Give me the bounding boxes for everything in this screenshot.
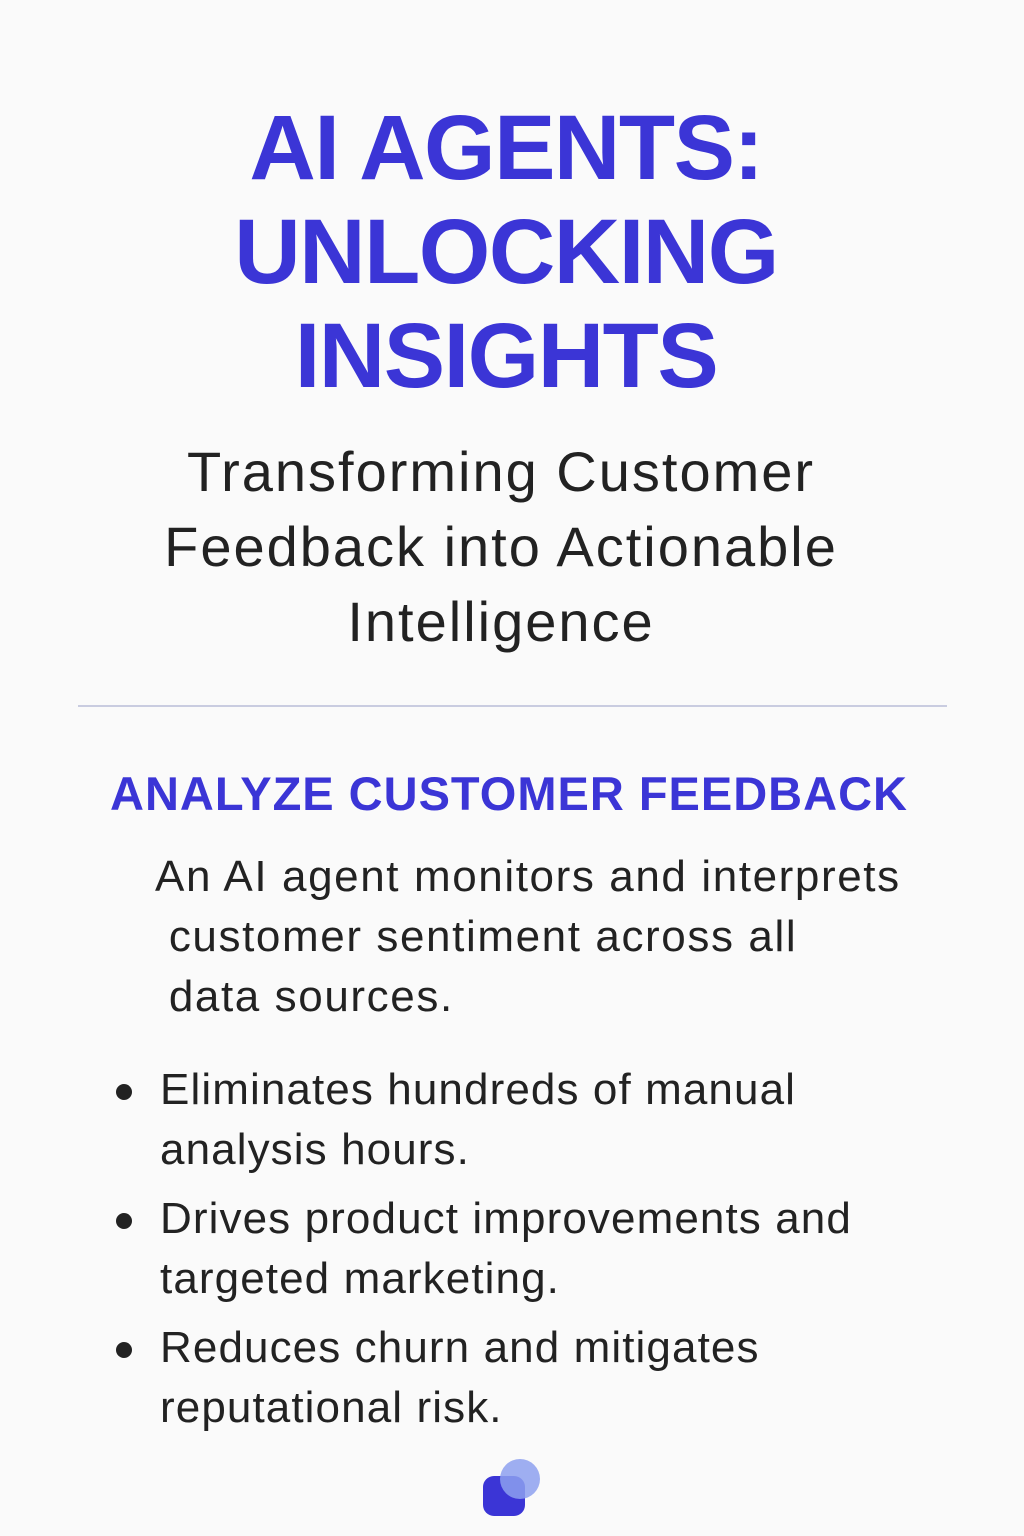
description paragraph <box>155 852 901 1021</box>
icon: overlapping shapes logo <box>483 1459 540 1516</box>
title <box>234 97 778 407</box>
description paragraph: data sources. <box>169 972 454 1021</box>
subtitle: Feedback into Actionable <box>164 515 838 578</box>
description paragraph: An AI agent monitors and interprets <box>155 852 901 901</box>
title: AI AGENTS: <box>249 97 763 199</box>
subtitle: Intelligence <box>347 590 655 653</box>
bullet 1 <box>116 1065 796 1174</box>
subtitle: Transforming Customer <box>187 440 815 503</box>
bullet 1: Eliminates hundreds of manual <box>160 1065 796 1114</box>
bullet 3 <box>116 1323 760 1432</box>
bullet 3: Reduces churn and mitigates <box>160 1323 760 1372</box>
bullet 2: Drives product improvements and <box>160 1194 852 1243</box>
bullet list <box>116 1065 852 1432</box>
title: INSIGHTS <box>295 305 717 407</box>
bullet 2: targeted marketing. <box>160 1254 560 1303</box>
bullet 1: analysis hours. <box>160 1125 470 1174</box>
subtitle <box>164 440 838 653</box>
section heading: ANALYZE CUSTOMER FEEDBACK <box>110 767 908 820</box>
title: UNLOCKING <box>234 201 778 303</box>
bullet 3: reputational risk. <box>160 1383 503 1432</box>
bullet 2 <box>116 1194 852 1303</box>
description paragraph: customer sentiment across all <box>169 912 797 961</box>
